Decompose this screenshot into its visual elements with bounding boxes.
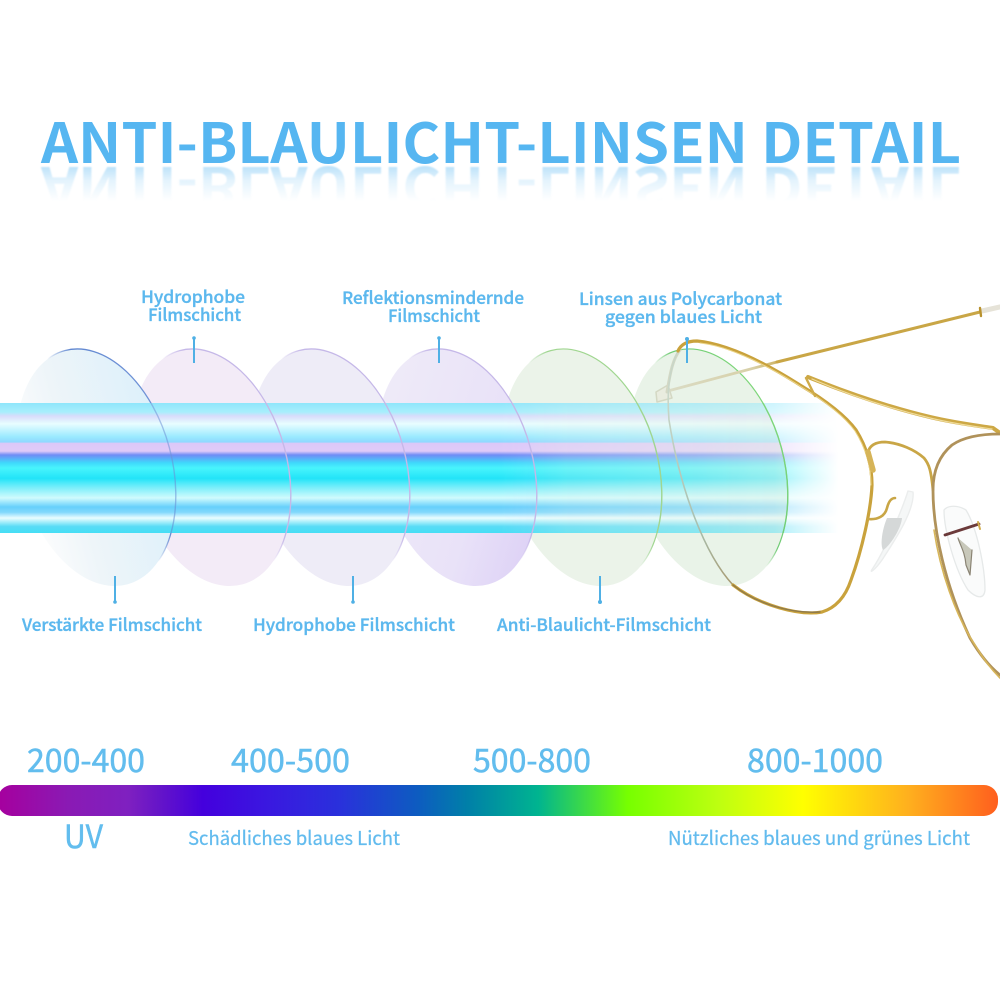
connector: anti-blue bottom (598, 576, 602, 604)
connector: reinforced bottom (113, 576, 117, 604)
label: UV: UV (64, 812, 104, 858)
label: anti-blue film: Anti-Blaulicht-Filmschicht (497, 611, 711, 636)
right rim (933, 434, 1000, 675)
lens 6: polycarbonate lens (603, 331, 813, 604)
label: hydrophobe film bottom: Hydrophobe Filmschicht (253, 611, 455, 636)
label: hydrophobe film top (141, 283, 245, 326)
wavelength 200-400: 200-400 (27, 736, 145, 782)
label: harmful blue light: Schädliches blaues Licht (188, 824, 400, 851)
left nose pad (871, 491, 913, 571)
left nose pad arm (868, 498, 895, 519)
temple arm, ghost part (664, 362, 777, 392)
wavelength 400-500: 400-500 (231, 736, 350, 782)
title: ANTI-BLAULICHT-LINSEN DETAIL (40, 151, 961, 231)
brow bar (808, 377, 1000, 433)
front rim ghost side (668, 351, 733, 585)
label: anti-reflective film: Filmschicht (388, 302, 480, 327)
wavelength 800-1000: 800-1000 (747, 736, 883, 782)
left rim (678, 341, 872, 613)
label: polycarbonate lens: Linsen aus Polycarbonat (579, 285, 782, 310)
glasses (656, 307, 1000, 678)
lens stack (0, 331, 813, 604)
connectors (113, 336, 689, 604)
lens 5: anti-blue-light film (477, 331, 687, 604)
hinge (656, 385, 672, 402)
wavelength 500-800: 500-800 (473, 736, 591, 782)
connector: hydrophobe top (192, 336, 196, 363)
label: hydrophobe film top: Filmschicht (148, 301, 241, 326)
light beam (0, 403, 860, 533)
lens 4: anti-reflective film (352, 331, 562, 604)
label: useful blue and green light: Nützliches blaues und grünes Licht (668, 824, 970, 851)
lens 1: reinforced film (0, 331, 201, 604)
label: polycarbonate lens (579, 285, 782, 328)
spectrum bar (0, 785, 998, 816)
connector: reflection top (437, 336, 441, 363)
bridge (868, 442, 933, 490)
connector: polycarbonate top (685, 337, 689, 363)
lens 3: hydrophobic film (225, 331, 435, 604)
right nose pad (944, 506, 985, 597)
title (40, 122, 960, 195)
temple arm, gold part (777, 312, 980, 362)
label: reinforced film: Verstärkte Filmschicht (21, 611, 202, 636)
lens edges over beam (150, 403, 788, 533)
connector: hydrophobe bottom (351, 576, 355, 604)
label: anti-reflective film: Reflektionsmindernde (342, 284, 524, 309)
lens 2: hydrophobic film (106, 331, 316, 604)
right nose pad arm (945, 524, 979, 535)
label: polycarbonate lens: gegen blaues Licht (605, 303, 762, 328)
title: ANTI-BLAULICHT-LINSEN DETAIL (40, 99, 961, 179)
label: anti-reflective film (342, 284, 524, 327)
label: hydrophobe film top: Hydrophobe (141, 283, 245, 308)
